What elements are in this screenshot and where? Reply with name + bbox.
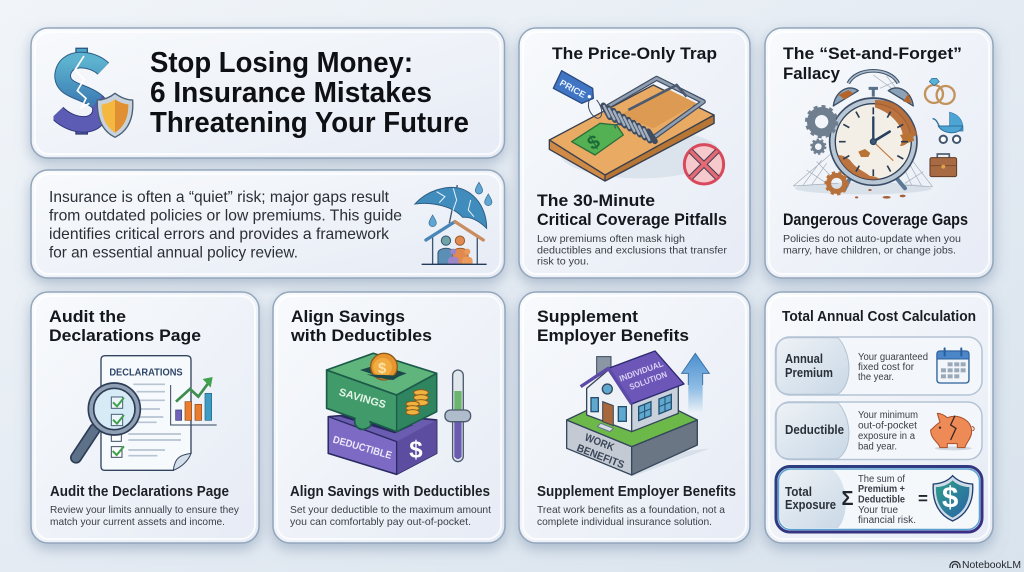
text: coverage gaps description: marry, have children, or change jobs.	[783, 244, 956, 256]
heading: audit the declarations page: Audit the	[49, 307, 126, 326]
text: price trap description	[537, 233, 728, 268]
text: price trap description: risk to you.	[537, 256, 589, 268]
text: audit description: Review your limits annually to ensure they	[50, 504, 240, 516]
heading: title	[150, 47, 469, 139]
heading: title: Stop Losing Money:	[150, 47, 413, 79]
panel: audit the declarations page	[31, 292, 259, 543]
icon: house on work benefits foundation: BENEFITS	[575, 442, 626, 471]
heading: align savings with deductibles: with Deductibles	[290, 326, 432, 345]
text: align description: Set your deductible to the maximum amount	[290, 504, 491, 516]
text: introduction: identifies critical errors and provides a framework	[49, 226, 390, 243]
icon: mousetrap with price tag: $	[584, 131, 604, 155]
row: annual premium: fixed cost for	[858, 362, 915, 373]
row: annual premium: Annual	[785, 352, 823, 366]
heading: set-and-forget fallacy: Fallacy	[783, 64, 841, 83]
subheading: the 30-minute critical coverage pitfalls	[537, 191, 727, 229]
heading: audit the declarations page	[49, 307, 201, 345]
row: annual premium	[776, 337, 982, 395]
row: total exposure: Total	[785, 485, 812, 499]
heading: set-and-forget fallacy	[783, 44, 962, 83]
heading: supplement employer benefits	[537, 307, 689, 345]
text: audit description: match your current assets and income.	[50, 516, 225, 528]
row: annual premium: Your guaranteed	[858, 352, 928, 363]
icon: savings and deductible puzzle boxes with slider: DEDUCTIBLE	[331, 435, 393, 462]
row: deductible: Your minimum	[858, 410, 918, 421]
row: total exposure: Deductible	[858, 494, 905, 506]
panel: supplement employer benefits	[519, 292, 750, 543]
row: total exposure: The sum of	[858, 474, 905, 485]
subheading: the 30-minute critical coverage pitfalls: Critical Coverage Pitfalls	[537, 210, 727, 229]
row: total exposure: Exposure	[785, 498, 836, 512]
heading: title: 6 Insurance Mistakes	[150, 77, 432, 109]
text: coverage gaps description	[783, 233, 961, 256]
row: deductible: exposure in a	[858, 431, 915, 442]
text: supplement description: Treat work benefits as a foundation, not a	[537, 504, 725, 516]
icon: savings and deductible puzzle boxes with slider: $	[409, 437, 423, 464]
text: price trap description: Low premiums often mask high	[537, 233, 685, 245]
panel: title	[31, 28, 504, 158]
heading: total annual cost calculation: Total Annual Cost Calculation	[782, 309, 976, 325]
text: introduction: from outdated policies or low premiums. This guide	[49, 208, 402, 224]
heading: set-and-forget fallacy: The “Set-and-Forget”	[783, 44, 962, 63]
icon: house on work benefits foundation	[567, 351, 710, 477]
icon: savings and deductible puzzle boxes with slider: SAVINGS	[337, 386, 387, 411]
text: price trap description: deductibles and exclusions that transfer	[537, 244, 728, 256]
row: annual premium: the year.	[858, 372, 894, 383]
row: total exposure: =	[918, 489, 928, 508]
text: align description	[290, 504, 491, 528]
subheading: supplement employer benefits: Supplement Employer Benefits	[537, 483, 736, 500]
row: total exposure: financial risk.	[858, 515, 916, 526]
heading: supplement employer benefits: Supplement	[537, 307, 638, 326]
row: total exposure: Σ	[842, 488, 854, 510]
icon: house on work benefits foundation: SOLUTION	[628, 369, 668, 392]
subheading: audit the declarations page: Audit the Declarations Page	[50, 483, 229, 500]
icon: calendar	[937, 348, 969, 383]
logo: NotebookLM: NotebookLM	[962, 559, 1021, 571]
panel: set-and-forget fallacy	[765, 28, 993, 278]
panel: total annual cost calculation	[765, 292, 993, 543]
icon: broken dollar and shield	[57, 48, 133, 137]
subheading: align savings with deductibles: Align Savings with Deductibles	[290, 483, 490, 500]
subheading: dangerous coverage gaps: Dangerous Coverage Gaps	[783, 210, 968, 229]
icon: mousetrap with price tag	[549, 71, 724, 184]
row: deductible	[776, 402, 982, 460]
heading: align savings with deductibles	[290, 307, 432, 345]
text: introduction: for an essential annual policy review.	[49, 244, 298, 262]
text: align description: you can comfortably pay out-of-pocket.	[290, 516, 471, 528]
row: total exposure: Your true	[858, 505, 898, 516]
icon: declarations document with magnifier and chart: DECLARATIONS	[109, 368, 183, 379]
icon: house on work benefits foundation: INDIVIDUAL	[618, 358, 665, 384]
text: introduction	[49, 189, 402, 262]
icon: dollar shield	[933, 476, 973, 521]
icon: savings and deductible puzzle boxes with slider: $	[378, 361, 386, 377]
text: supplement description: complete individual insurance solution.	[537, 516, 712, 528]
heading: align savings with deductibles: Align Savings	[291, 307, 405, 326]
heading: title: Threatening Your Future	[150, 107, 469, 139]
row: annual premium: Premium	[785, 366, 833, 380]
row: total exposure: Premium +	[858, 484, 905, 495]
row: deductible: Deductible	[785, 423, 844, 437]
text: audit description	[50, 504, 240, 528]
heading: the price-only trap: The Price-Only Trap	[552, 44, 717, 63]
text: introduction: Insurance is often a “quiet” risk; major gaps result	[49, 189, 390, 206]
row: total exposure	[776, 466, 982, 532]
panel: introduction	[31, 170, 504, 278]
panel: the price-only trap	[519, 28, 750, 278]
icon: declarations document with magnifier and chart	[76, 356, 217, 470]
icon: mousetrap with price tag: PRICE	[558, 78, 587, 100]
icon: house on work benefits foundation: WORK	[583, 432, 616, 454]
icon: dollar shield: $	[942, 482, 958, 515]
icon: broken piggy bank	[931, 413, 974, 450]
icon: savings and deductible puzzle boxes with slider	[327, 353, 471, 474]
heading: audit the declarations page: Declarations Page	[49, 326, 201, 345]
row: deductible: bad year.	[858, 442, 897, 452]
heading: supplement employer benefits: Employer Benefits	[537, 326, 689, 345]
row: deductible: out-of-pocket	[858, 420, 917, 432]
text: supplement description	[537, 504, 725, 528]
icon: broken umbrella over family home	[415, 182, 492, 264]
subheading: the 30-minute critical coverage pitfalls: The 30-Minute	[537, 191, 655, 210]
icon: rusty alarm clock with webs and gears	[793, 71, 963, 199]
panel: align savings with deductibles	[273, 292, 505, 543]
text: coverage gaps description: Policies do not auto-update when you	[783, 233, 961, 245]
